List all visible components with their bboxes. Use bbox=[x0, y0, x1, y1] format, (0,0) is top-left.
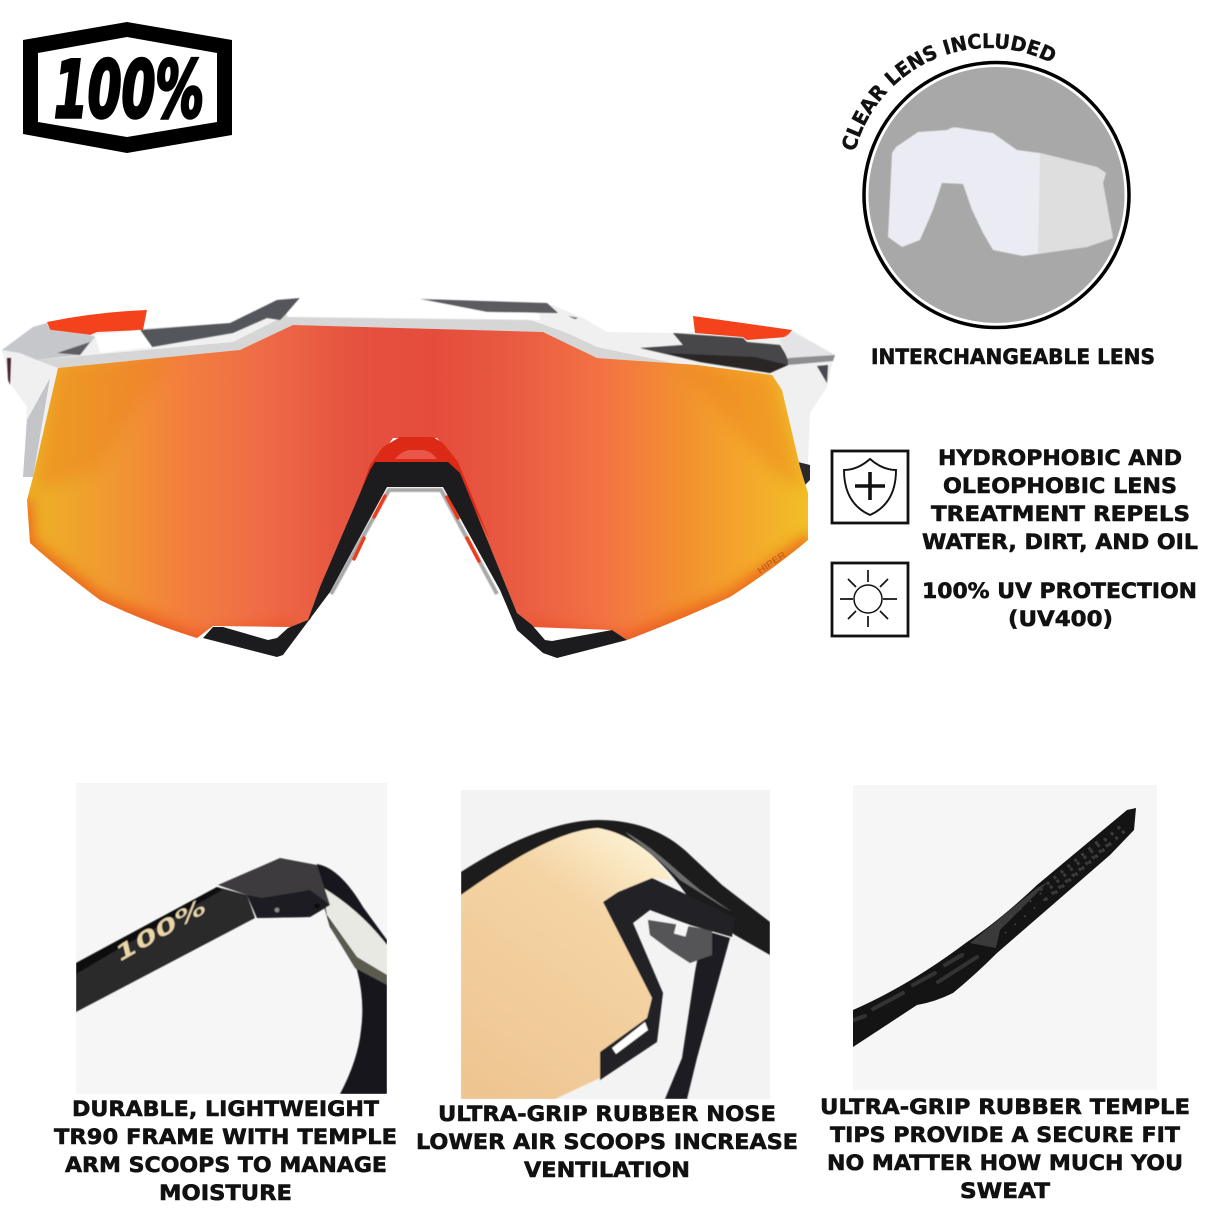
temple arm bbox=[76, 887, 255, 1012]
text: hydrophobic: HYDROPHOBIC AND bbox=[938, 446, 1182, 471]
curved heading: CLEAR LENS INCLUDED bbox=[842, 33, 1056, 150]
olive shadow bbox=[328, 918, 387, 985]
text: UV protection: (UV400) bbox=[1008, 607, 1113, 632]
red tab right bbox=[693, 316, 792, 340]
grey fringe under bridge bbox=[331, 490, 497, 594]
caption: frame: ARM SCOOPS TO MANAGE bbox=[65, 1153, 387, 1178]
caption: temple tips: NO MATTER HOW MUCH YOU bbox=[827, 1151, 1183, 1176]
caption: frame: MOISTURE bbox=[159, 1181, 292, 1206]
text: hydrophobic: TREATMENT REPELS bbox=[931, 502, 1190, 527]
text: UV protection: 100% UV PROTECTION bbox=[922, 579, 1197, 604]
caption: nose: LOWER AIR SCOOPS INCREASE bbox=[416, 1130, 798, 1155]
slots bbox=[854, 955, 977, 1020]
inner nose frame bbox=[600, 878, 735, 1080]
caption: frame bbox=[54, 1097, 397, 1206]
frame body bbox=[2, 298, 835, 487]
caption: temple tips bbox=[820, 1095, 1190, 1204]
gold 100% logo: 100% bbox=[110, 895, 211, 966]
product image: sunglasses bbox=[2, 298, 835, 658]
panel: temple arm photo bbox=[76, 783, 387, 1094]
top frame bbox=[461, 820, 770, 955]
lens reflection arc bbox=[395, 450, 437, 459]
air scoop gap bbox=[612, 1022, 648, 1054]
circle badge bbox=[864, 62, 1129, 328]
text: hydrophobic bbox=[922, 446, 1198, 555]
panel: nose photo bbox=[461, 790, 770, 1099]
icon: sun box bbox=[832, 563, 908, 636]
lens bbox=[24, 325, 811, 643]
caption: frame: TR90 FRAME WITH TEMPLE bbox=[54, 1125, 397, 1150]
caption: temple tips: ULTRA-GRIP RUBBER TEMPLE bbox=[820, 1095, 1190, 1120]
logo: 100% badge: 100% bbox=[54, 46, 204, 136]
caption: nose: ULTRA-GRIP RUBBER NOSE bbox=[438, 1102, 776, 1127]
caption: INTERCHANGEABLE LENS bbox=[871, 345, 1155, 370]
red inner nose edge bbox=[340, 437, 490, 550]
temple stub right bbox=[798, 462, 810, 487]
text: hydrophobic: OLEOPHOBIC LENS bbox=[943, 474, 1177, 499]
caption: nose: VENTILATION bbox=[524, 1158, 690, 1183]
rubber temple tip bbox=[853, 808, 1136, 1047]
nose pads red bbox=[354, 496, 479, 561]
caption: frame: DURABLE, LIGHTWEIGHT bbox=[72, 1097, 379, 1122]
rubber spring bbox=[648, 920, 712, 963]
clear lens shape bbox=[888, 127, 1113, 256]
panel: temple tip photo bbox=[853, 785, 1157, 1090]
caption: temple tips: SWEAT bbox=[960, 1179, 1050, 1204]
left ear silver shading bbox=[23, 378, 50, 477]
lens marking: HIPER bbox=[756, 549, 788, 576]
gold lens bbox=[461, 826, 672, 1099]
black nose frame bbox=[203, 462, 627, 658]
caption: nose bbox=[416, 1102, 798, 1183]
front frame curve bbox=[317, 864, 387, 1094]
panel: clear lens badge bbox=[842, 33, 1155, 370]
caption: temple tips: TIPS PROVIDE A SECURE FIT bbox=[830, 1123, 1180, 1148]
text: hydrophobic: WATER, DIRT, AND OIL bbox=[922, 530, 1198, 555]
text: UV protection bbox=[922, 579, 1197, 632]
icon: shield box bbox=[832, 451, 908, 523]
white frame stripe bbox=[322, 887, 387, 975]
hinge bbox=[218, 858, 330, 918]
grey under-brow band bbox=[37, 315, 772, 375]
logo: 100% badge bbox=[23, 22, 232, 153]
smooth grip panel bbox=[970, 882, 1048, 948]
camo patches bbox=[2, 298, 835, 385]
grip dots bbox=[1040, 825, 1128, 900]
red tab left bbox=[47, 310, 147, 335]
temple arm bbox=[665, 930, 730, 1099]
